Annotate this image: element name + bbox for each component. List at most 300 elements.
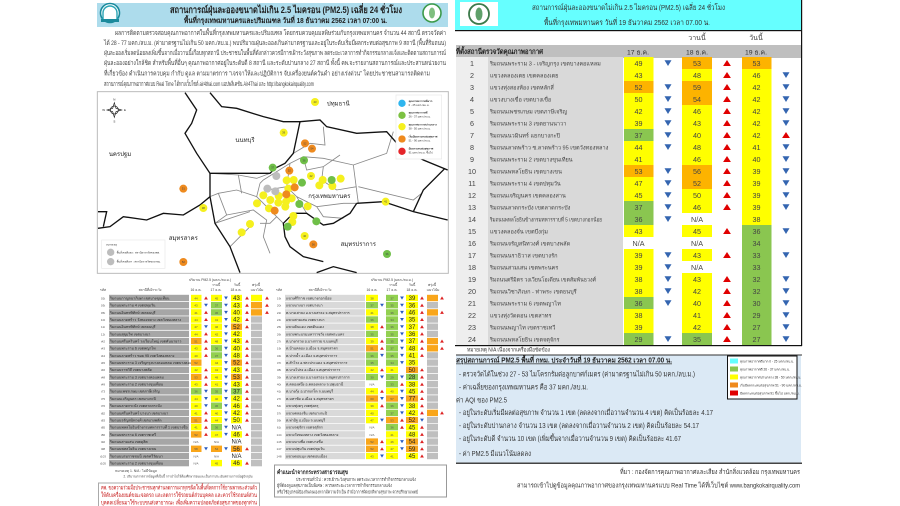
map markers: station dots <box>179 98 391 266</box>
table header: left: 18 ธ.ค. <box>231 288 242 292</box>
table rows: second column: 147 <box>276 447 282 451</box>
table rows: left: 03t <box>101 304 105 308</box>
table rows: left: 36 <box>194 390 198 394</box>
compass rose: E <box>124 108 126 112</box>
table: district readings: 2 <box>470 71 474 80</box>
table rows: left: 42 <box>233 332 240 338</box>
table: district readings: ริมถนนเจริญนคร เขตคลองสาน <box>489 192 566 199</box>
table rows: second column: 38 <box>370 325 374 329</box>
table rows: second column: 145 <box>276 440 282 444</box>
note: N/A explanation: หมายเหตุ N/A เนื่องจากเครื่องมือขัดข้อง <box>467 346 550 354</box>
table: district readings: ริมถนนพระราม 4 เขตปทุมวัน <box>489 180 561 187</box>
table rows: left: 37 <box>233 389 240 395</box>
table header: left: แนวโน้ม <box>251 287 263 292</box>
table rows: left: 41 <box>215 318 218 322</box>
map markers: station dots: 39 <box>282 131 286 135</box>
table rows: left: 40 <box>215 411 218 415</box>
table rows: left: t49 <box>101 383 105 387</box>
table rows: second column: 39t <box>277 375 281 379</box>
legend: colour levels in summary: คุณภาพอากาศปานกลาง 38 - 50 มคก./ลบ.ม. <box>740 376 801 380</box>
text block: situation summary paragraph: สถานการณ์คุณภาพอากาศแบบ Real Time ได้ทางเว็บไซต์ air4thai.com แอปพลิเคชัน Air4Thai และ http://bangkokairquality.com <box>104 79 314 88</box>
table: district readings: 1 <box>470 59 474 68</box>
summary text lines: - ค่าเฉลี่ยของกรุงเทพมหานคร คือ 37 มคก./ลบ.ม. <box>459 382 588 392</box>
table header: right poster: ที่ตั้งสถานีตรวจวัดคุณภาพอากาศ <box>456 45 543 56</box>
legend: colour levels in summary: คุณภาพอากาศดีมาก 0 - 25 มคก./ลบ.ม. <box>740 360 794 364</box>
table rows: left: ริมถนนอินทรพิทักษ์ เขตธนบุรี <box>110 324 156 330</box>
table rows: left: t43 <box>101 347 105 351</box>
table: district readings: 40 <box>752 155 760 164</box>
table: district readings: 8 <box>470 143 474 152</box>
table rows: left: N/A <box>231 440 242 446</box>
table rows: second column: 26t <box>277 332 281 336</box>
table: district readings: ริมถนนพระราม 2 เขตบางขุนเทียน <box>489 156 573 163</box>
table rows: left: 36 <box>215 404 218 408</box>
table rows: left: t73 <box>101 390 105 394</box>
table: district readings: 42 <box>752 95 760 104</box>
callout: Ministry of Public Health advice: หรือใช้อุปกรณ์ป้องกันตนเองหากมีความจำเป็น ถ้ามีอาการผิดปกติทางสุขภาพ ควรปรึกษาแพทย์ <box>277 488 418 496</box>
table: district readings: 44 <box>634 143 642 152</box>
table: district readings: แขวงคลองเตย เขตคลองเตย <box>490 73 558 79</box>
legend: station type key <box>102 240 165 268</box>
table: district readings: 7 <box>470 131 474 140</box>
table rows: left: 43 <box>194 383 198 387</box>
table rows: left: ริมถนนเพชรเกษม เขตภาษีเจริญ <box>110 389 160 394</box>
table rows: second column: 38 <box>409 382 416 388</box>
table: district readings: 17 <box>468 251 476 260</box>
table: district readings: 41 <box>752 143 760 152</box>
table: district readings: 15 <box>468 227 476 236</box>
table rows: second column: ต.บางกุ้ง อ.ปากเกร็ด จ.นนทบุรี <box>286 388 333 395</box>
table rows: second column: 19t <box>277 296 281 300</box>
text block: situation summary paragraph: ได้ 28 - 77 มคก./ลบ.ม. (ค่ามาตรฐานไม่เกิน 50 มคก./ลบ.ม.) พบปริมาณฝุ่นละอองเกินค่ามาตรฐานและอยู่ในระดับเริ่มมีผลกระทบต่อสุขภาพ 9 สถานี (พื้นที่ริมถนน) <box>103 38 446 47</box>
legend: station type key: พื้นที่เขตสีเทา : สถานีตรวจวัดของกทม. <box>116 260 161 264</box>
table rows: left: t92 <box>101 440 105 444</box>
table: district readings: 24 <box>468 335 476 344</box>
table rows: left: 36 <box>215 426 218 430</box>
table rows: second column: ต.ท่าอิฐ อ.เมือง จ.นนทบุรี <box>286 417 325 423</box>
table rows: second column: 54t <box>277 404 281 408</box>
table: district readings: ริมถนนพญาไท เขตราชเทวี <box>489 324 555 331</box>
table rows: left <box>100 295 269 467</box>
table rows: left: 52 <box>233 325 240 331</box>
icon: Bangkok emblem right <box>423 4 441 22</box>
table rows: left: 44 <box>194 332 198 336</box>
table: district readings: 53 <box>752 59 760 68</box>
table rows: left: 46 <box>233 433 240 439</box>
table: district readings: 30 <box>752 299 760 308</box>
callout: red health warning: ให้ดับเครื่องยนต์ขณะจอดรถ และลดการใช้รถยนต์ส่วนบุคคล และควรใช้รถยนต์ส่วน <box>101 491 257 499</box>
table: district readings: ริมถนนจรัญสนิทวงศ์ เขตบางพลัด <box>489 239 571 247</box>
table rows: left: ริมถนนเจริญนคร เขตบางกะปิ <box>110 397 157 401</box>
notes: table footnotes <box>115 468 253 480</box>
table rows: second column: 37t <box>277 361 281 365</box>
table: district readings: 27 <box>752 323 760 332</box>
table header: second column <box>276 278 439 292</box>
table rows: left: ริมถนนศรีนครินทร์ วงเวียนใหญ่ เขตคันนายาว <box>110 338 181 343</box>
table: district readings: ริมถนนลาดพร้าว ซ.ลาดพร้าว 95 เขตวังทองหลาง <box>489 144 609 151</box>
table header: left: วานนี้ <box>212 282 221 287</box>
table header: left: 16 ธ.ค. <box>191 288 202 292</box>
table: district readings: 39 <box>752 179 760 188</box>
table rows: second column: 77 <box>409 397 416 403</box>
table rows: left: ริมถนนลาดกระบัง เขตลาดกระบัง <box>110 404 162 408</box>
table rows: second column: แขวงจตุจักร เขตจตุจักร <box>286 426 323 431</box>
summary text lines <box>456 370 713 458</box>
table rows: left: 49 <box>215 375 218 379</box>
table header: left: ปริมาณ PM2.5 (มคก./ลบ.ม.) <box>189 278 231 282</box>
callout: red health warning <box>98 482 260 506</box>
table rows: left: 43 <box>233 339 240 345</box>
table rows: left: 41 <box>215 368 218 372</box>
table rows: left: ริมถนนศรีนครินทร์ บางนา เขตบางนา <box>110 410 168 415</box>
table: district readings: ริมถนนนราธิวาส เขตบางรัก <box>489 252 558 259</box>
table rows: second column: 37 <box>370 304 374 308</box>
legend: AQI colour levels: 91 มคก./ลบ.ม. ขึ้นไป <box>409 151 433 155</box>
table rows: left: 51 <box>194 339 198 343</box>
table header: second column: สถานีที่เฝ้าระวัง <box>309 287 332 292</box>
table rows: left: 02t <box>101 296 105 300</box>
map markers: station dots: 51 <box>182 187 185 191</box>
table rows: second column: ต.บางโปรง อ.เมือง จ.สมุทรปราการ <box>286 367 340 373</box>
header: right poster title bar <box>455 0 801 30</box>
table: district readings: 48 <box>693 143 701 152</box>
table: district readings: ริมถนนวิชาภิเษก - ท่าพระ เขตธนบุรี <box>489 288 577 295</box>
table header: second column: รหัส <box>276 288 283 292</box>
table: district readings: 39 <box>752 191 760 200</box>
table rows: left: t44 <box>101 354 105 358</box>
table: district readings: 36 <box>752 227 760 236</box>
table rows: left: 56 <box>233 447 240 453</box>
map markers: station dots: 41 <box>384 200 388 204</box>
table header: second column: วันนี้ <box>409 282 416 287</box>
table rows: left: 36 <box>215 311 218 315</box>
summary text lines: - ตรวจวัดได้ในช่วง 27 - 53 ไมโครกรัมต่อลูกบาศก์เมตร (ค่ามาตรฐานไม่เกิน 50 มคก./ลบ.ม.) <box>459 370 695 378</box>
map labels: province names: ปทุมธานี <box>327 99 350 107</box>
table: left station readings <box>100 278 269 467</box>
title: left main title: สถานการณ์ฝุ่นละอองขนาดไม่เกิน 2.5 ไมครอน (PM2.5) เฉลี่ย 24 ชั่วโมง <box>170 3 402 16</box>
legend: AQI colour levels: 51 - 90 มคก./ลบ.ม. <box>409 139 431 143</box>
summary text lines: - อยู่ในระดับดี จำนวน 10 เขต (เพิ่มขึ้นจากเมื่อวานจำนวน 9 เขต) คิดเป็นร้อยละ 41.67 <box>459 433 681 443</box>
table rows: left: 46 <box>215 325 218 329</box>
table rows: second column: 35 <box>390 304 394 308</box>
table rows: second column: แขวงพระบรมมหาราชวัง เขตพระนคร <box>286 332 344 336</box>
table: district readings: 29 <box>752 311 760 320</box>
table rows: left: 44 <box>194 397 198 401</box>
table: district readings: 41 <box>693 311 701 320</box>
map markers: station dots: 56 <box>312 242 315 246</box>
table rows: second column: 35 <box>370 361 374 365</box>
table: district readings: 53 <box>693 59 701 68</box>
map markers: station dots: 40 <box>303 234 307 238</box>
table: district readings: 10 <box>468 167 476 176</box>
table rows: second column: 38t <box>277 368 281 372</box>
table rows: second column: 60 <box>370 397 374 401</box>
table: district readings: 41 <box>634 155 642 164</box>
table: district readings: ริมถนนพหลโยธิน เขตจตุจักร <box>489 335 560 343</box>
map markers: station dots: 52 <box>182 260 185 264</box>
table header: right poster: 19 ธ.ค. <box>745 50 767 56</box>
map markers: station dots: 52 <box>304 141 307 145</box>
table rows: left: 40 <box>215 397 218 401</box>
table rows: left: 40 <box>194 354 198 358</box>
table: district readings: ริมถนนพระราม 3 เขตยานนาวา <box>489 120 566 127</box>
table: district readings: ริมถนนลาดกระบัง เขตลาดกระบัง <box>489 204 571 211</box>
table rows: left: ริมถนนพระราม 4 เขตปทุมวัน <box>110 304 156 309</box>
table: district readings: 43 <box>693 275 701 284</box>
notes: table footnotes: 2. ปริมาณการตรวจข้อมูลที่เป็นนี้ การนำไปใช้ต้องศึกษาก่อนและเป็นการประเมินสถานการณ์อยู่ปัจจุบัน <box>124 472 253 480</box>
table rows: second column: N/A <box>369 426 375 430</box>
table rows: left: 40 <box>233 311 240 317</box>
table: district readings: 42 <box>693 323 701 332</box>
table rows: left: ริมถนนลาดพร้าว ซอย 95 เขตวังทองหลาง <box>110 353 175 358</box>
table header: left: สถานีที่เฝ้าระวัง <box>139 287 162 292</box>
table rows: second column: 34 <box>390 361 394 365</box>
table: district readings: 4 <box>470 95 474 104</box>
table header: second column: ปริมาณ PM2.5 (มคก./ลบ.ม.) <box>371 278 413 282</box>
table rows: second column: 48 <box>409 346 416 352</box>
summary text lines: ค่า AQI ของ PM2.5 <box>456 396 507 404</box>
table rows: left: 42 <box>233 397 240 403</box>
table rows: left: N/A <box>231 454 242 460</box>
table rows: left: 44 <box>194 318 198 322</box>
table: district readings: 46 <box>693 203 701 212</box>
map markers: station dots: 43 <box>314 100 317 104</box>
table: district readings: 11 <box>468 179 476 188</box>
table: district readings: 42 <box>634 107 642 116</box>
title: right main title: สถานการณ์ฝุ่นละอองขนาดไม่เกิน 2.5 ไมครอน (PM2.5) เฉลี่ย 24 ชั่วโมง <box>532 2 725 12</box>
table rows: left: t48 <box>101 375 105 379</box>
table rows: left: ริมถนนกาญจนาภิเษก เขตบางขุนเทียน <box>110 295 170 301</box>
table: district readings: 36 <box>634 299 642 308</box>
table rows: left: 47 <box>194 325 198 329</box>
map markers: station dots: 36 <box>386 252 389 256</box>
table rows: second column: 41 <box>390 368 394 372</box>
table rows: second column: 59 <box>409 447 416 453</box>
table rows: left: t105 <box>100 461 106 465</box>
legend: colour levels in summary <box>728 356 802 399</box>
table rows: left: ริมถนนสุขุมวิท เขตบางนา <box>110 332 150 337</box>
table: district readings: ริมถนนนวมินทร์ แยกบางกะปิ <box>489 131 561 139</box>
table rows: left: 10t <box>101 318 105 322</box>
table rows: second column: 40t <box>277 383 281 387</box>
callout: Ministry of Public Health advice: ประชาชนทั่วไป : ควรเฝ้าระวังสุขภาพ ลดระยะเวลาการทำกิจกรรมกลางแจ้ง <box>296 476 416 483</box>
table: district readings: 42 <box>752 83 760 92</box>
table rows: second column: 35 <box>390 332 394 336</box>
table: district readings: แขวงทุ่งวัดดอน เขตสาทร <box>490 312 551 319</box>
table: district readings: N/A <box>691 215 703 224</box>
legend: colour levels in summary: เริ่มมีผลกระทบต่อสุขภาพ 51 - 90 มคก./ลบ.ม. <box>740 382 802 388</box>
callout: Ministry of Public Health advice <box>274 465 446 497</box>
table rows: second column: 27t <box>277 339 281 343</box>
map markers: station dots: 37 <box>271 166 275 170</box>
table: district readings: 47 <box>634 179 642 188</box>
legend: AQI colour levels <box>396 95 442 159</box>
table: district readings: 38 <box>634 275 642 284</box>
table rows: left: ริมถนนพระราม 6 เขตราชเทวี <box>110 432 156 437</box>
map labels: province names: สมุทรสาคร <box>169 235 199 242</box>
table: district readings: 23 <box>468 323 476 332</box>
table header: right poster <box>456 31 801 58</box>
table: district readings: 46 <box>752 71 760 80</box>
table rows: left: 46 <box>233 461 240 467</box>
table rows: left: t82 <box>101 411 105 415</box>
table rows: second column: 45 <box>409 389 416 395</box>
table: district readings: 37 <box>634 203 642 212</box>
table: district readings: 38 <box>634 311 642 320</box>
table: district readings: 56 <box>693 167 701 176</box>
table rows: left: N/A <box>214 454 219 458</box>
table rows: second column: 40 <box>390 390 394 394</box>
table rows: second column: 52 <box>370 440 374 444</box>
table rows: second column: แขวงวังทองหลาง เขตวังทองหลาง <box>286 433 339 437</box>
table: district readings <box>456 57 790 345</box>
table: district readings: 16 <box>468 239 476 248</box>
table rows: second column: 46 <box>409 311 416 317</box>
table rows: left: 43 <box>233 368 240 374</box>
table rows: left: ริมถนนสามเสน เขตดุสิต <box>110 440 148 445</box>
table rows: left: 47 <box>215 433 218 437</box>
table rows: left: N/A <box>193 440 199 444</box>
callout: Ministry of Public Health advice: คำแนะนำจากกระทรวงสาธารณสุข <box>277 468 348 476</box>
legend: AQI colour levels: เริ่มมีผลกระทบต่อสุขภาพ <box>409 134 438 140</box>
legend: AQI colour levels: มีผลกระทบต่อสุขภาพ <box>408 147 433 152</box>
table rows: left: 45 <box>215 461 218 465</box>
table: district readings: 29 <box>634 335 642 344</box>
table: district readings: 32 <box>752 275 760 284</box>
table rows: left: ริมถนนพระราม 6 เขตพญาไท <box>110 346 156 351</box>
table rows: second column: ต.บางเสาธง อ.บางเสาธง จ.สมุทรปราการ <box>286 375 350 380</box>
summary text lines: - ค่า PM2.5 มีแนวโน้มลดลง <box>459 449 531 458</box>
table rows: second column: 37 <box>390 411 394 415</box>
table header: left: วันนี้ <box>234 282 241 287</box>
table rows: left: 44 <box>194 296 198 300</box>
callout: Ministry of Public Health advice: ผู้ที่ต้องดูแลสุขภาพเป็นพิเศษ : ควรลดระยะเวลาการทำกิจกรรมกลางแจ้ง <box>277 481 392 489</box>
table: district readings: N/A <box>691 263 703 272</box>
table rows: left: 45 <box>215 296 218 300</box>
legend: AQI colour levels: 38 - 50 มคก./ลบ.ม. <box>409 126 431 130</box>
table rows: second column: 25t <box>277 325 281 329</box>
table rows: second column: 144 <box>276 433 282 437</box>
table header: second column: 16 ธ.ค. <box>367 288 378 292</box>
table rows: second column: 41 <box>370 311 374 315</box>
table rows: second column: 36 <box>390 325 394 329</box>
table rows: left: 52 <box>194 361 198 365</box>
table rows: left: 11t <box>101 325 105 329</box>
table rows: left: 52 <box>233 361 240 367</box>
table rows: second column: ต.ปากน้ำ อ.เมือง จ.สมุทรปราการ <box>286 353 337 359</box>
table rows: second column: N/A <box>369 383 375 387</box>
table header: second column: 17 ธ.ค. <box>387 288 398 292</box>
table rows: left: ริมถนนจรัญสนิทวงศ์ เขตบางพลัด <box>110 418 162 422</box>
table rows: second column: 37 <box>390 347 394 351</box>
table rows: second column: 38 <box>409 404 416 410</box>
table rows: second column: 35 <box>390 354 394 358</box>
table: right station readings of left poster <box>276 278 444 460</box>
table rows: left: 42 <box>233 411 240 417</box>
table rows: left: 53 <box>194 375 198 379</box>
table header: second column: แนวโน้ม <box>427 287 439 292</box>
table rows: left: N/A <box>193 454 199 458</box>
table: district readings: 38 <box>752 215 760 224</box>
table: district readings: 42 <box>693 287 701 296</box>
table rows: second column: 54 <box>409 440 416 446</box>
legend: AQI colour levels: คุณภาพอากาศดี <box>409 111 428 116</box>
map markers: station dots: 54 <box>311 147 314 151</box>
table rows: second column: 30 <box>370 375 374 379</box>
table rows: left: 42 <box>233 318 240 324</box>
table rows: second column: 35 <box>390 339 394 343</box>
notes: table footnotes: หมายเหตุ 1. N/A : ไม่มีข้อมูล <box>115 468 157 474</box>
panel: left poster <box>97 3 448 506</box>
table: district readings: 39 <box>634 119 642 128</box>
table rows: left: 58 <box>194 447 198 451</box>
table: district readings: 34 <box>752 239 760 248</box>
table: district readings: 50 <box>693 191 701 200</box>
table: district readings: 3 <box>470 83 474 92</box>
table rows: left: t45 <box>101 361 105 365</box>
table rows: left: 35 <box>215 390 218 394</box>
table rows: second column: 29 <box>390 375 394 379</box>
table header: right poster: วานนี้ <box>688 31 706 42</box>
table rows: left: ริมถนนอินทรพิทักษ์ เขตธนบุรี <box>110 310 156 316</box>
table rows: second column: 39 <box>370 339 374 343</box>
table rows: second column: 24t <box>277 318 281 322</box>
table rows: left: ริมถนนพหลโยธินข้างกรมทหารราบที่ 1 เขตบางซื่อ <box>110 425 188 430</box>
subtitle: left area and date: พื้นที่กรุงเทพมหานครและปริมณฑล วันที่ 18 ธันวาคม 2562 เวลา 07:00 น. <box>184 14 387 25</box>
panel: daily summary <box>456 354 802 464</box>
table rows: left: 37 <box>215 354 218 358</box>
table rows: second column: 36 <box>390 311 394 315</box>
table rows: left: 12t <box>101 332 105 336</box>
map labels: province names: นครปฐม <box>109 151 131 158</box>
table rows: second column: 42 <box>370 368 374 372</box>
table rows: second column: N/A <box>369 433 375 437</box>
table: district readings: 46 <box>693 155 701 164</box>
table rows: left: t83 <box>101 418 105 422</box>
table rows: second column: 36 <box>390 404 394 408</box>
table header: right poster: วันนี้ <box>749 31 763 42</box>
compass rose: N <box>113 98 115 102</box>
table rows: left: ริมถนนบรมราชชนนี เขตทวีวัฒนา <box>110 453 163 458</box>
table rows: left: 43 <box>194 304 198 308</box>
table rows: left: t76 <box>101 404 105 408</box>
table: district readings: 33 <box>752 251 760 260</box>
table rows: left: 54 <box>215 447 218 451</box>
compass rose: W <box>102 108 105 112</box>
table rows: second column: แขวงบางซื่อ เขตบางซื่อ <box>286 439 323 444</box>
table rows: left: 46 <box>233 404 240 410</box>
table: district readings: 59 <box>693 83 701 92</box>
table rows: second column: 57 <box>390 397 394 401</box>
table: district readings: ริมถนนตรีมิตร วงเวียนโอเดียน เขตสัมพันธวงศ์ <box>489 275 596 283</box>
icon: left agency logo <box>100 4 120 22</box>
map labels: province names: กรุงเทพมหานคร <box>308 193 351 200</box>
table rows: left: 41 <box>215 383 218 387</box>
table: district readings: แขวงคลองจั่น เขตบึงกุ่ม <box>490 227 548 235</box>
table rows: second column: ต.คลองหนึ่ง อ.คลองหลวง จ.ปทุมธานี <box>286 382 344 388</box>
table rows: second column: แขวงสามเสน เขตบางนา <box>286 318 325 322</box>
table: district readings: 46 <box>693 107 701 116</box>
summary text lines: - อยู่ในระดับเริ่มมีผลต่อสุขภาพ จำนวน 1 เขต (ลดลงจากเมื่อวานจำนวน 4 เขต) คิดเป็นร้อยละ 4.17 <box>459 407 713 417</box>
table rows: second column: 20t <box>277 304 281 308</box>
icon: Bangkok emblem in white box <box>460 2 498 26</box>
table rows: second column: 28 <box>409 375 416 381</box>
table rows: left: ริมถนนพระราม 3 เขตบางคอแหลม <box>110 375 164 379</box>
table: district readings: 22 <box>468 311 476 320</box>
map markers: station dots: 52 <box>288 169 291 173</box>
table rows: left: t98 <box>101 447 105 451</box>
map labels: province names: นนทบุรี <box>235 136 255 144</box>
